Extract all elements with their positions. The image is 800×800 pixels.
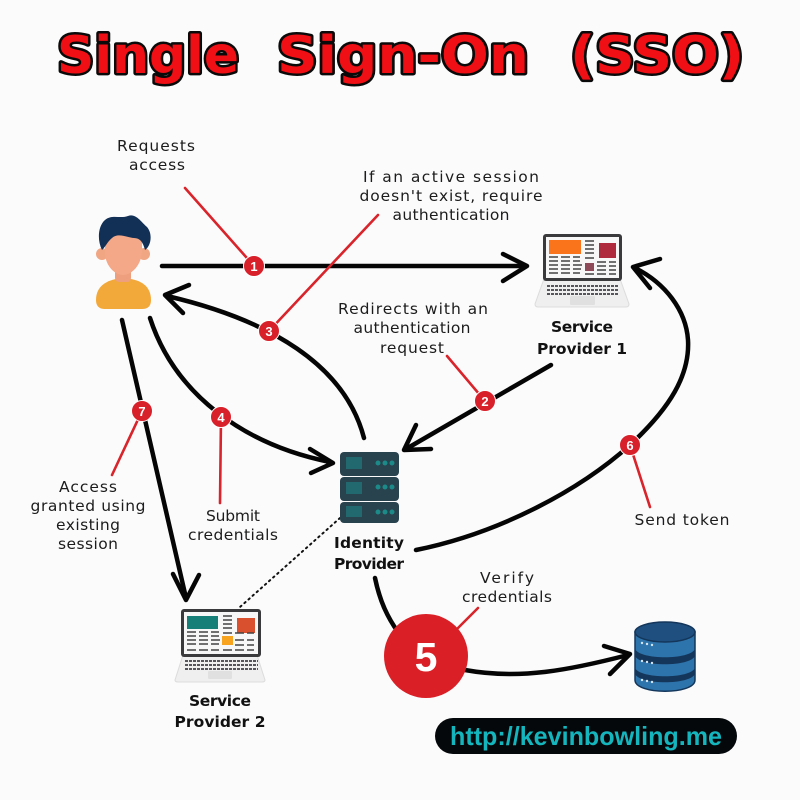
label: redirects: Redirects with an xyxy=(338,300,488,318)
label: redirects xyxy=(338,300,488,357)
label: if an active session: authentication xyxy=(392,206,510,224)
arrow 3: require authentication xyxy=(165,285,364,438)
label: service provider 1: Service xyxy=(551,318,613,336)
arrow 6: send token xyxy=(416,259,688,550)
title: Sign-On xyxy=(277,26,529,86)
label: identity provider xyxy=(334,534,404,573)
badge 7: 7 xyxy=(138,404,146,419)
label: service provider 2: Provider 2 xyxy=(174,713,266,731)
label: verify credentials: Verify xyxy=(480,569,534,587)
label: redirects: request xyxy=(380,339,444,357)
icon: database xyxy=(635,622,695,691)
icon: identity provider server xyxy=(340,452,399,523)
arrow 2: redirect xyxy=(404,365,551,450)
badge 6 xyxy=(620,434,640,456)
arrow 1: requests access xyxy=(162,254,527,281)
badge 3 xyxy=(258,320,280,342)
label: submit credentials: credentials xyxy=(188,526,278,544)
label: service provider 1 xyxy=(537,318,627,358)
label: redirects: authentication xyxy=(354,319,470,337)
label: verify credentials: credentials xyxy=(462,588,552,606)
label: send token: Send token xyxy=(634,511,730,529)
label: identity provider: Identity xyxy=(334,534,404,552)
title xyxy=(57,26,744,86)
arrow 5: verify credentials xyxy=(375,578,630,674)
label: requests access: Requests xyxy=(117,137,195,155)
icon: user xyxy=(96,215,151,309)
icon: laptop service provider 1 xyxy=(535,234,629,307)
arrow 7: access granted xyxy=(122,320,199,600)
label: submit credentials: Submit xyxy=(206,507,260,525)
badge 7 xyxy=(132,400,152,422)
badge 1: 1 xyxy=(250,259,258,274)
title: Single xyxy=(57,26,239,86)
label: access granted: granted using xyxy=(30,497,146,515)
label: submit credentials xyxy=(188,507,278,544)
title: (SSO) xyxy=(570,26,744,86)
badge 5 (large) xyxy=(384,614,468,698)
label: identity provider: Provider xyxy=(334,555,404,573)
label: service provider 2: Service xyxy=(189,692,251,710)
label: requests access xyxy=(117,137,195,174)
label: verify credentials xyxy=(462,569,552,606)
label: service provider 1: Provider 1 xyxy=(537,340,627,358)
label: access granted: existing xyxy=(56,516,120,534)
dotted link: identity provider to service provider 2 xyxy=(240,518,340,607)
badge 4: 4 xyxy=(217,410,225,425)
badge 3: 3 xyxy=(265,324,273,339)
arrow 4: submit credentials xyxy=(150,318,333,473)
badge 5 (large): 5 xyxy=(415,634,437,680)
badge 4 xyxy=(210,406,232,428)
label: access granted: Access xyxy=(59,478,117,496)
badge 6: 6 xyxy=(626,438,634,453)
label: if an active session: If an active session xyxy=(363,168,539,186)
badge 2 xyxy=(474,390,496,412)
label: if an active session: doesn't exist, require xyxy=(360,187,542,205)
url badge: http://kevinbowling.me xyxy=(450,721,722,751)
badge 1 xyxy=(244,256,264,276)
label: requests access: access xyxy=(129,156,185,174)
label: access granted: session xyxy=(58,535,118,553)
badge 2: 2 xyxy=(481,394,489,409)
label: if an active session xyxy=(360,168,542,224)
leader lines xyxy=(112,188,650,628)
label: access granted xyxy=(30,478,146,553)
icon: laptop service provider 2 xyxy=(175,609,265,682)
label: service provider 2 xyxy=(174,692,266,731)
